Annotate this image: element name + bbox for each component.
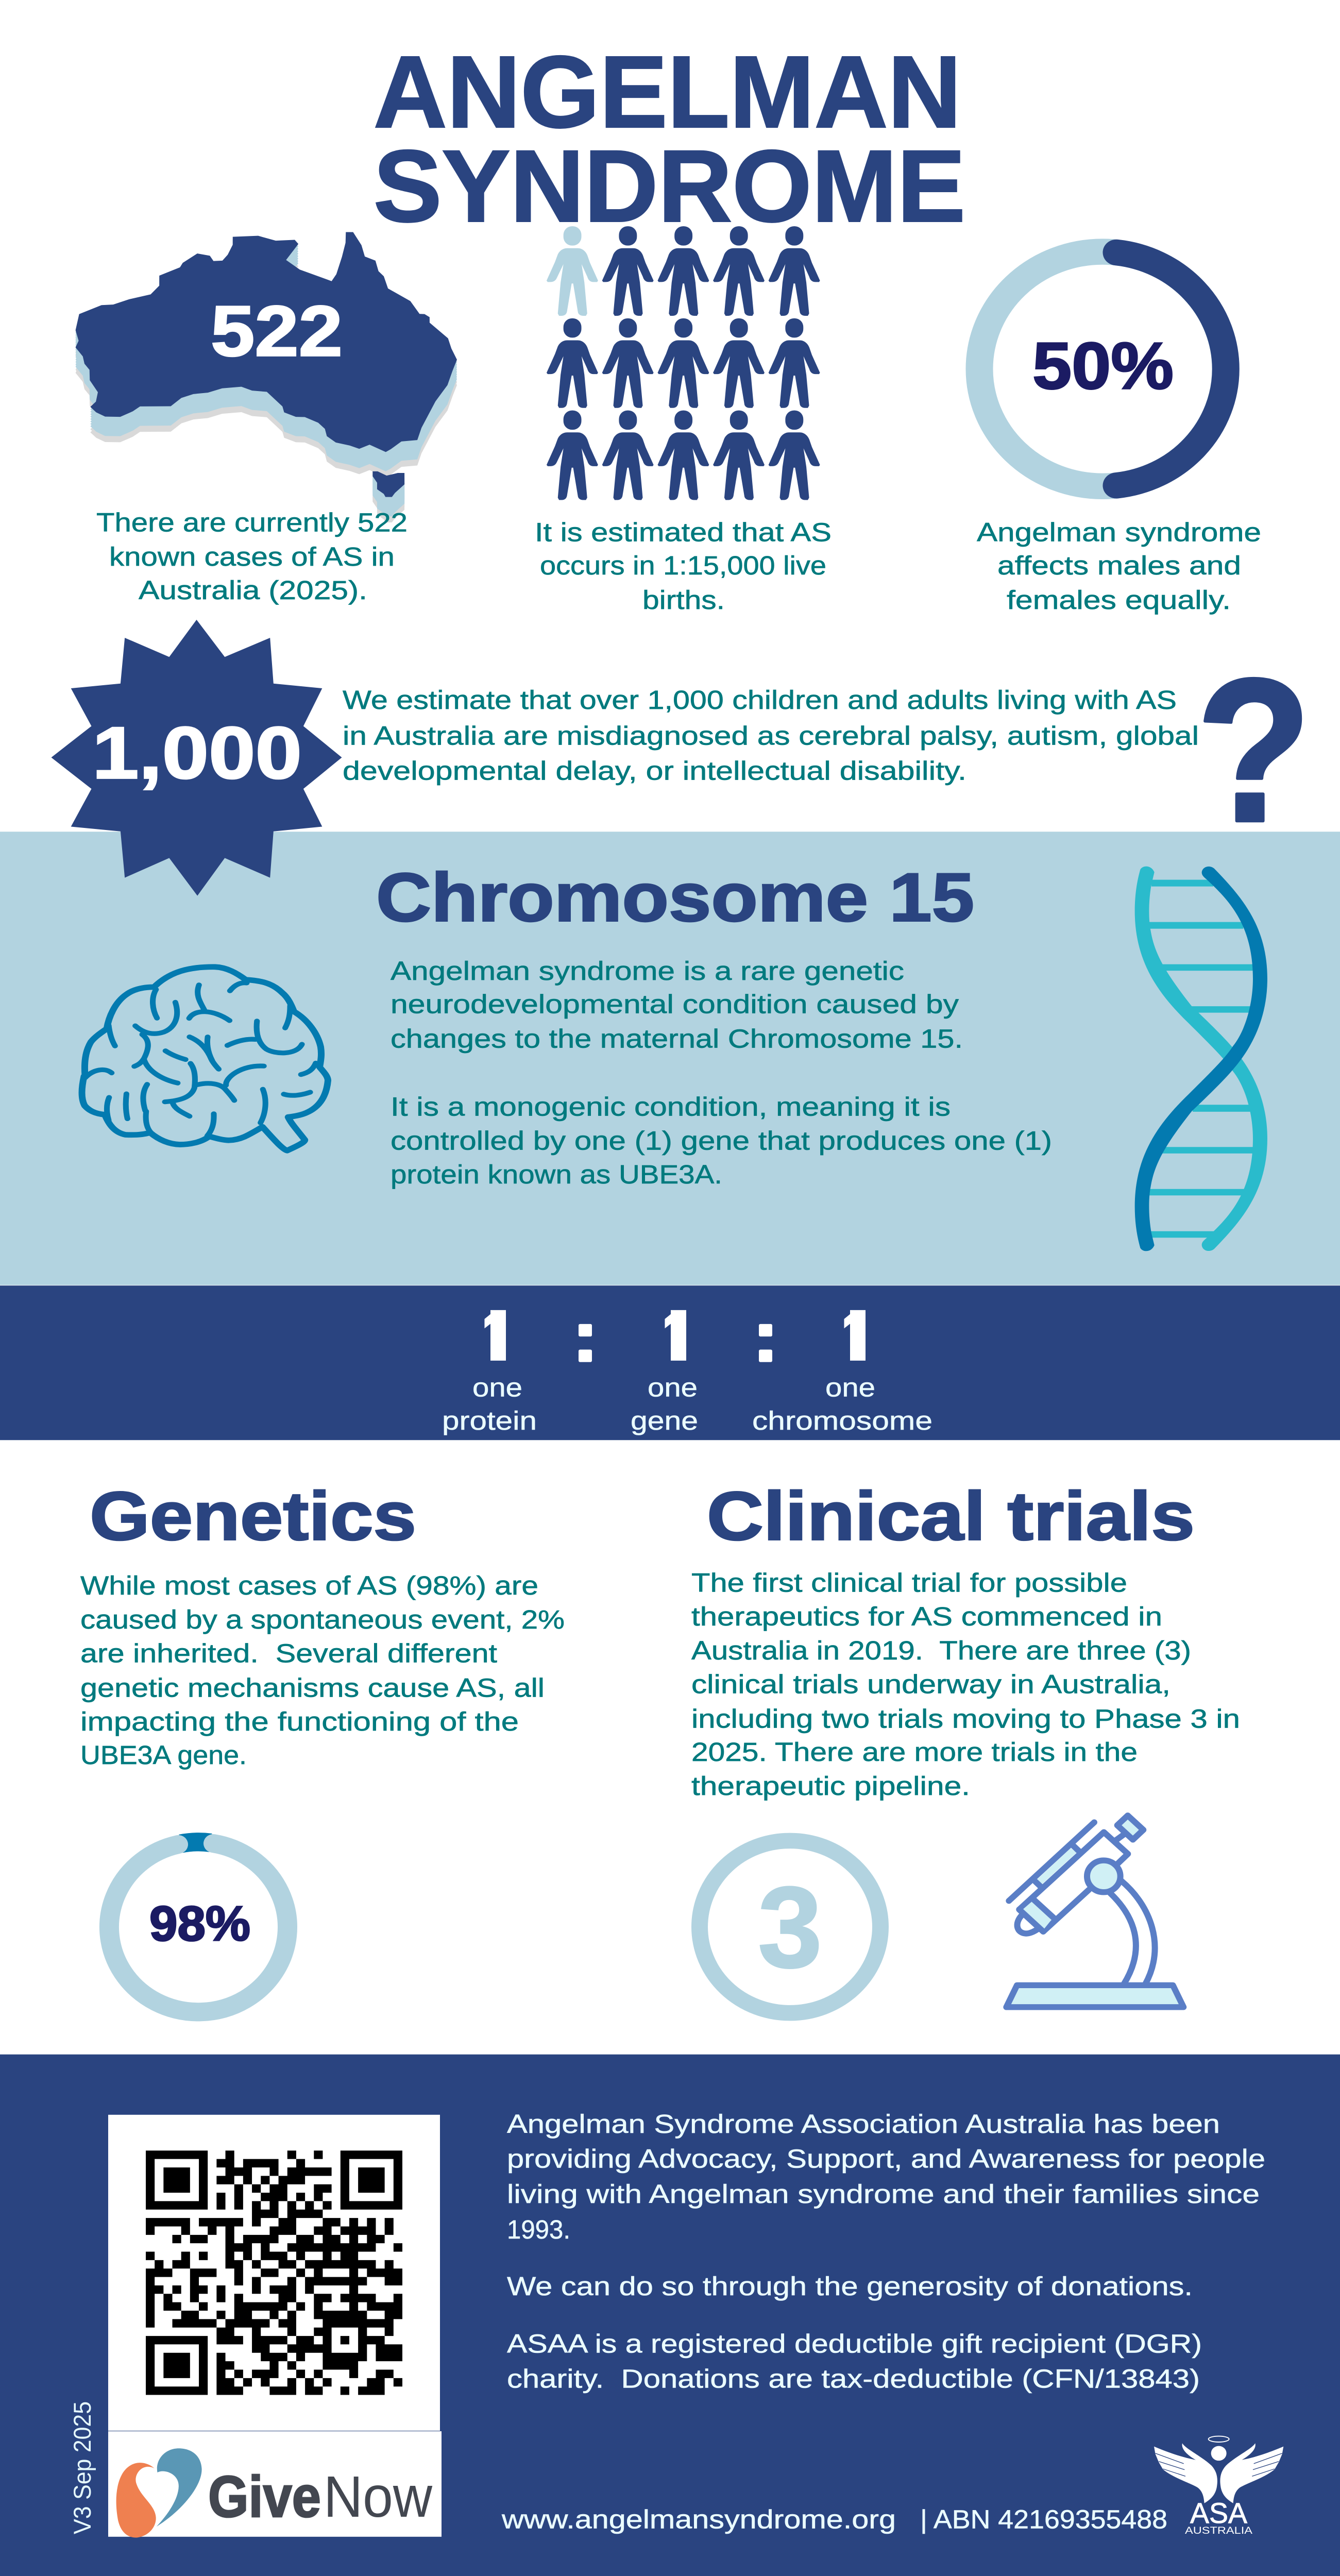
text: chromosome 15 explanation: controlled by one (1) gene that produces one (1) <box>391 1126 1052 1156</box>
text: genetics: impacting the functioning of the <box>80 1707 519 1737</box>
panel: one protein, one gene, one chromosome: : <box>573 1298 598 1376</box>
text: chromosome 15 explanation: changes to the maternal Chromosome 15. <box>391 1024 963 1054</box>
title: ANGELMAN <box>374 35 961 149</box>
donut chart: 50%: 50% <box>1032 329 1174 403</box>
text: genetics: UBE3A gene. <box>80 1740 247 1770</box>
icon: question mark: ? <box>1196 636 1312 864</box>
text: genetics: genetic mechanisms cause AS, all <box>80 1673 545 1703</box>
text: chromosome 15 explanation: neurodevelopmental condition caused by <box>391 990 959 1019</box>
text: about the association: Angelman Syndrome Association Australia has been <box>507 2109 1220 2139</box>
pictogram: 1 in 15,000 people <box>547 226 820 500</box>
logo: GiveNow: Give <box>208 2464 321 2529</box>
text: genetics: caused by a spontaneous event, 2% <box>80 1605 565 1635</box>
text: about the association: charity. Donations are tax-deductible (CFN/13843) <box>507 2364 1200 2394</box>
text: clinical trials: clinical trials underway in Australia, <box>691 1670 1171 1699</box>
text: about the association: 1993. <box>507 2215 570 2244</box>
panel: one protein, one gene, one chromosome: chromosome <box>752 1406 932 1436</box>
text: clinical trials: Australia in 2019. There are three (3) <box>691 1636 1191 1666</box>
heading: Chromosome 15: Chromosome 15 <box>376 859 974 936</box>
text: incidence: It is estimated that AS <box>535 518 832 547</box>
icon: microscope <box>1006 1816 1183 2007</box>
panel: one protein, one gene, one chromosome: protein <box>442 1406 537 1436</box>
panel: one protein, one gene, one chromosome <box>0 1285 1340 1440</box>
text: clinical trials: therapeutics for AS commenced in <box>691 1602 1162 1632</box>
text: clinical trials: 2025. There are more trials in the <box>691 1737 1138 1767</box>
text: chromosome 15 explanation: It is a monogenic condition, meaning it is <box>391 1092 951 1122</box>
panel: one protein, one gene, one chromosome: one <box>472 1373 522 1402</box>
donut chart: 98% <box>109 1842 287 2012</box>
text: about the association <box>507 2109 1265 2394</box>
heading: Genetics: Genetics <box>90 1478 416 1554</box>
text: clinical trials <box>691 1568 1240 1801</box>
panel: one protein, one gene, one chromosome: 1 <box>661 1296 693 1376</box>
text: chromosome 15 explanation: Angelman syndrome is a rare genetic <box>391 956 904 986</box>
panel: one protein, one gene, one chromosome: one <box>648 1373 698 1402</box>
text: version: V3 Sep 2025 <box>69 2401 96 2534</box>
text: clinical trials: including two trials moving to Phase 3 in <box>691 1704 1240 1734</box>
donut chart: 50% <box>979 252 1226 486</box>
text: genetics: While most cases of AS (98%) are <box>80 1571 538 1601</box>
panel: footer background <box>0 2055 1340 2576</box>
text: clinical trials: The first clinical trial for possible <box>691 1568 1127 1598</box>
text: males and females: females equally. <box>1007 585 1231 615</box>
text: known cases: There are currently 522 <box>96 508 408 537</box>
text: genetics: are inherited. Several different <box>80 1639 497 1668</box>
panel: one protein, one gene, one chromosome: : <box>753 1298 778 1376</box>
text: misdiagnosis: developmental delay, or intellectual disability. <box>343 756 966 786</box>
text: misdiagnosis: in Australia are misdiagnosed as cerebral palsy, autism, global <box>343 721 1199 751</box>
logo: ASA Australia angel: ASA <box>1190 2498 1247 2530</box>
text: incidence: births. <box>642 585 725 615</box>
logo: GiveNow <box>108 2431 442 2537</box>
icon: brain <box>82 967 328 1150</box>
text: known cases <box>96 508 408 605</box>
title: SYNDROME <box>374 129 965 243</box>
text: genetics <box>80 1571 565 1770</box>
text: misdiagnosis <box>343 685 1199 786</box>
text: website and ABN: www.angelmansyndrome.org <box>501 2505 896 2534</box>
text: clinical trials: therapeutic pipeline. <box>691 1771 970 1801</box>
panel: chromosome 15 background <box>0 832 1340 1285</box>
text: incidence <box>535 518 832 615</box>
text: about the association: providing Advocacy, Support, and Awareness for people <box>507 2144 1265 2174</box>
text: website and ABN <box>501 2505 1167 2534</box>
map: Australia with 522 count: 522 <box>211 292 343 371</box>
stat ring: 3 clinical trials: 3 <box>758 1862 822 1992</box>
map: Australia with 522 count <box>76 232 457 522</box>
donut chart: 98%: 98% <box>149 1896 250 1951</box>
panel: one protein, one gene, one chromosome: 1 <box>481 1296 513 1376</box>
text: about the association: ASAA is a registered deductible gift recipient (DGR) <box>507 2329 1202 2359</box>
text: about the association: We can do so through the generosity of donations. <box>507 2272 1193 2301</box>
text: about the association: living with Angelman syndrome and their families since <box>507 2179 1260 2209</box>
logo: ASA Australia angel: AUSTRALIA <box>1185 2526 1252 2536</box>
panel: one protein, one gene, one chromosome: one <box>825 1373 875 1402</box>
panel: one protein, one gene, one chromosome: gene <box>631 1406 698 1436</box>
stat ring: 3 clinical trials <box>700 1841 880 2013</box>
text: website and ABN: | ABN 42169355488 <box>920 2505 1167 2534</box>
text: incidence: occurs in 1:15,000 live <box>540 551 826 581</box>
text: males and females: Angelman syndrome <box>977 518 1261 547</box>
badge: 1,000 starburst: 1,000 <box>92 712 302 794</box>
text: chromosome 15 explanation <box>391 956 1052 1190</box>
text: chromosome 15 explanation: protein known as UBE3A. <box>391 1160 722 1190</box>
title <box>374 35 965 243</box>
text: males and females <box>977 518 1261 615</box>
icon: DNA helix <box>1135 867 1267 1251</box>
logo: GiveNow: Now <box>324 2464 433 2529</box>
text: known cases: known cases of AS in <box>109 542 395 572</box>
text: males and females: affects males and <box>997 551 1241 581</box>
QR code <box>108 2115 440 2431</box>
heading: Clinical trials: Clinical trials <box>707 1478 1195 1554</box>
logo: ASA Australia angel <box>1154 2436 1283 2536</box>
badge: 1,000 starburst <box>52 620 342 896</box>
text: misdiagnosis: We estimate that over 1,000 children and adults living with AS <box>343 685 1177 715</box>
panel: one protein, one gene, one chromosome: 1 <box>841 1296 873 1376</box>
text: known cases: Australia (2025). <box>139 575 367 605</box>
